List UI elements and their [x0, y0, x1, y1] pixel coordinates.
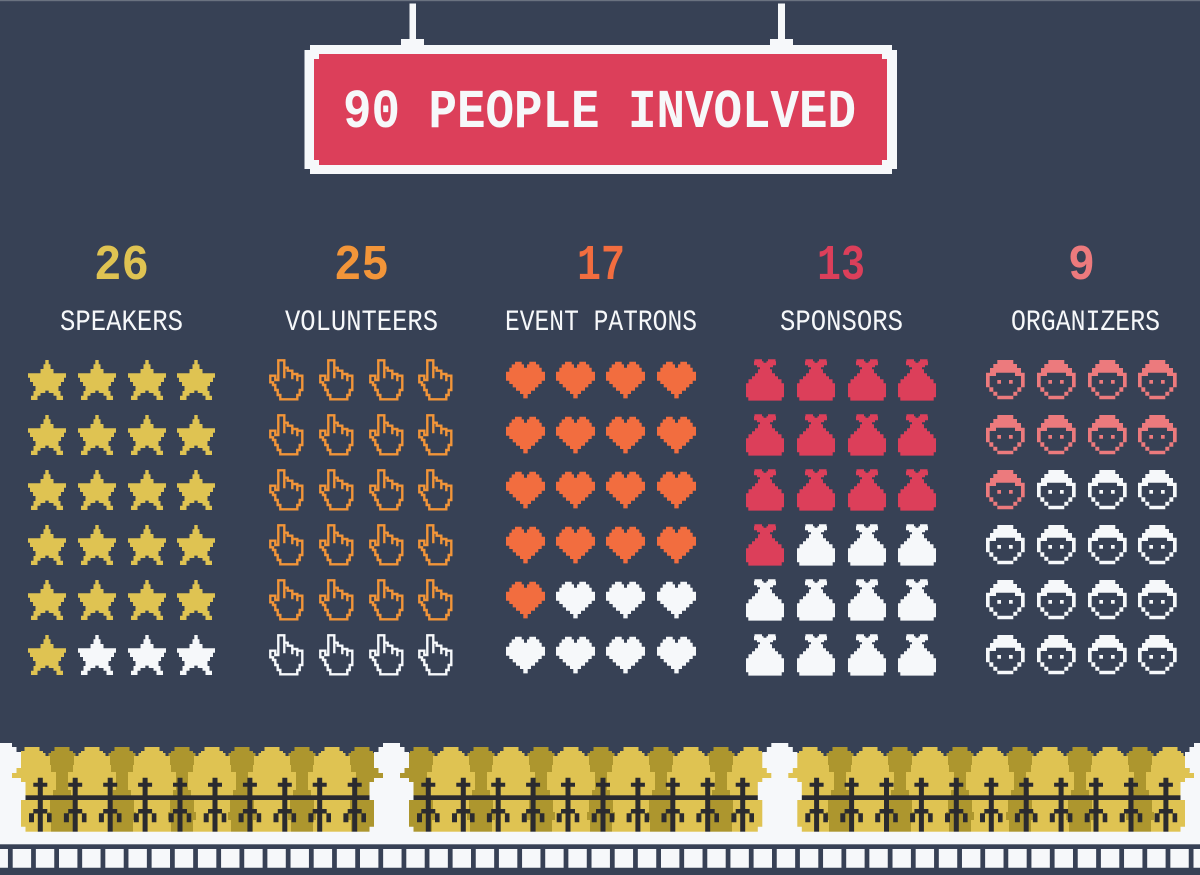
sign hanger left: [401, 4, 424, 45]
white hearts: [506, 582, 696, 673]
white pillars: [0, 743, 1200, 832]
sign red panel: [314, 54, 887, 165]
column: organizers: [986, 238, 1177, 674]
orange hands: [270, 360, 451, 619]
white hands: [270, 635, 451, 674]
garden scene: hedge, fence, pillars, ground: [0, 743, 1200, 858]
number 26: 26: [94, 238, 149, 295]
hand icon grid: [270, 360, 451, 674]
white faces: [986, 470, 1177, 674]
hanging sign: [304, 4, 897, 174]
money bag icon grid: [746, 359, 936, 676]
column: event patrons: [505, 238, 697, 673]
pink faces: [986, 360, 1177, 509]
face icon grid: [986, 360, 1177, 674]
column: volunteers: [270, 238, 451, 674]
filled stars: [28, 360, 215, 675]
sign hanger right: [770, 4, 793, 45]
number 25: 25: [334, 238, 389, 295]
title: 90 PEOPLE INVOLVED: [343, 81, 856, 144]
red bags: [746, 359, 936, 566]
label volunteers: VOLUNTEERS: [285, 306, 438, 340]
orange hearts: [506, 362, 696, 618]
label speakers: SPEAKERS: [60, 306, 183, 340]
column: sponsors: [746, 238, 936, 676]
iron fence: [0, 778, 1200, 832]
heart icon grid: [506, 362, 696, 673]
sign frame: [304, 45, 897, 174]
white stars: [78, 635, 215, 675]
white bags: [746, 524, 936, 676]
white tile row: [0, 849, 1200, 868]
white ground band: [0, 832, 1200, 844]
dark hedge layer: [0, 747, 1200, 832]
number 13: 13: [817, 238, 865, 295]
star icon grid: [28, 360, 215, 675]
label sponsors: SPONSORS: [780, 306, 903, 340]
number 9: 9: [1068, 238, 1095, 295]
number 17: 17: [577, 238, 625, 295]
label organizers: ORGANIZERS: [1011, 306, 1160, 340]
label event patrons: EVENT PATRONS: [505, 306, 697, 340]
column: speakers: [28, 238, 215, 675]
bright hedge layer: [8, 747, 1194, 832]
